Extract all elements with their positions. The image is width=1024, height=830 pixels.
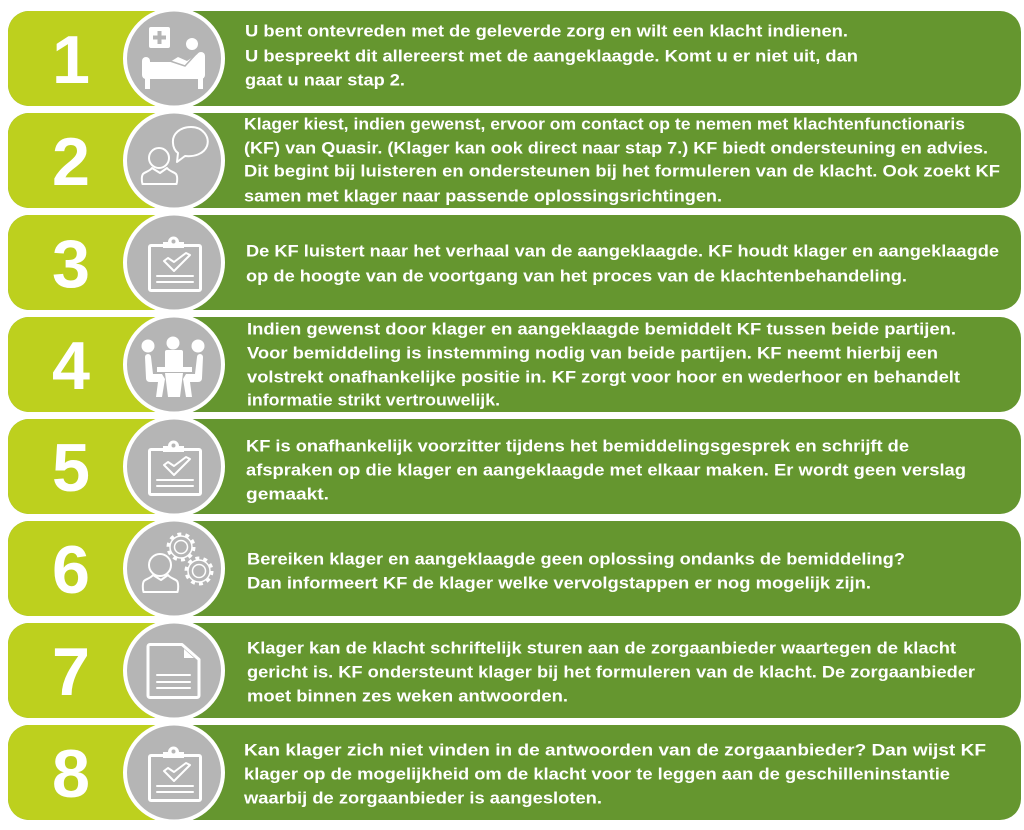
step 6 row (8, 520, 1021, 618)
step 3 row (8, 214, 1021, 312)
step 2 text (244, 116, 1000, 206)
step 7 row (8, 622, 1021, 720)
icon: person with gears (125, 520, 223, 618)
step number 6: 6 (52, 532, 90, 608)
step 6 text: Bereiken klager en aangeklaagde geen oplossing ondanks de bemiddeling? (247, 550, 905, 568)
step 3 text (246, 242, 999, 286)
step 4 text: informatie strikt vertrouwelijk. (247, 392, 500, 410)
step 1 text (245, 22, 858, 90)
step 1 row (8, 10, 1021, 108)
step number 8: 8 (52, 736, 90, 812)
icon: clipboard with check (125, 214, 223, 312)
step 4 text: volstrekt onafhankelijke positie in. KF zorgt voor hoor en wederhoor en behandelt (247, 368, 961, 386)
step 2 text: samen met klager naar passende oplossingsrichtingen. (244, 188, 722, 206)
step 7 text: gericht is. KF ondersteunt klager bij het formuleren van de klacht. De zorgaanbieder (247, 664, 976, 682)
step number 7: 7 (52, 634, 90, 710)
icon: person with speech bubble (125, 112, 223, 210)
step 5 row (8, 418, 1021, 516)
step 8 text: waarbij de zorgaanbieder is aangesloten. (243, 790, 602, 808)
step number 2: 2 (52, 124, 90, 200)
step 7 text: moet binnen zes weken antwoorden. (247, 688, 568, 706)
step 7 text: Klager kan de klacht schriftelijk sturen aan de zorgaanbieder waartegen de klacht (247, 640, 957, 658)
step 4 text: Indien gewenst door klager en aangeklaagde bemiddelt KF tussen beide partijen. (247, 320, 956, 338)
icon: patient in hospital bed (125, 10, 223, 108)
step 6 text (247, 550, 905, 592)
step 5 text: KF is onafhankelijk voorzitter tijdens het bemiddelingsgesprek en schrijft de (246, 438, 909, 456)
step number 3: 3 (52, 226, 90, 302)
step 8 row (8, 724, 1021, 822)
step 1 text: gaat u naar stap 2. (245, 72, 405, 90)
step 1 text: U bent ontevreden met de geleverde zorg en wilt een klacht indienen. (245, 22, 848, 40)
step 2 text: Dit begint bij luisteren en ondersteunen bij het formuleren van de klacht. Ook zoekt KF (244, 162, 1000, 180)
step number 4: 4 (52, 328, 90, 404)
step 8 text: klager op de mogelijkheid om de klacht voor te leggen aan de geschilleninstantie (244, 766, 950, 784)
step 5 text: afspraken op die klager en aangeklaagde met elkaar maken. Er wordt geen verslag (246, 462, 966, 480)
step 2 row (8, 112, 1021, 210)
step 8 text (243, 742, 986, 808)
step 4 row (8, 316, 1021, 414)
step 3 text: De KF luistert naar het verhaal van de aangeklaagde. KF houdt klager en aangeklaagde (246, 242, 999, 260)
step 7 text (247, 640, 976, 706)
step 1 text: U bespreekt dit allereerst met de aangeklaagde. Komt u er niet uit, dan (245, 48, 858, 66)
step 2 text: (KF) van Quasir. (Klager kan ook direct naar stap 7.) KF biedt ondersteuning en advies. (244, 140, 988, 158)
step number 1: 1 (52, 22, 90, 98)
step 8 text: Kan klager zich niet vinden in de antwoorden van de zorgaanbieder? Dan wijst KF (244, 742, 986, 760)
icon: clipboard with check (125, 418, 223, 516)
step number 5: 5 (52, 430, 90, 506)
step 6 text: Dan informeert KF de klager welke vervolgstappen er nog mogelijk zijn. (247, 574, 871, 592)
icon: meeting around a table (125, 316, 223, 414)
step 2 text: Klager kiest, indien gewenst, ervoor om contact op te nemen met klachtenfunctionaris (244, 116, 965, 134)
step 4 text: Voor bemiddeling is instemming nodig van beide partijen. KF neemt hierbij een (247, 344, 938, 362)
step 3 text: op de hoogte van de voortgang van het proces van de klachtenbehandeling. (246, 268, 907, 286)
step 4 text (247, 320, 961, 410)
icon: clipboard with check (125, 724, 223, 822)
step 5 text (246, 438, 966, 504)
step 5 text: gemaakt. (246, 486, 329, 504)
icon: document (125, 622, 223, 720)
